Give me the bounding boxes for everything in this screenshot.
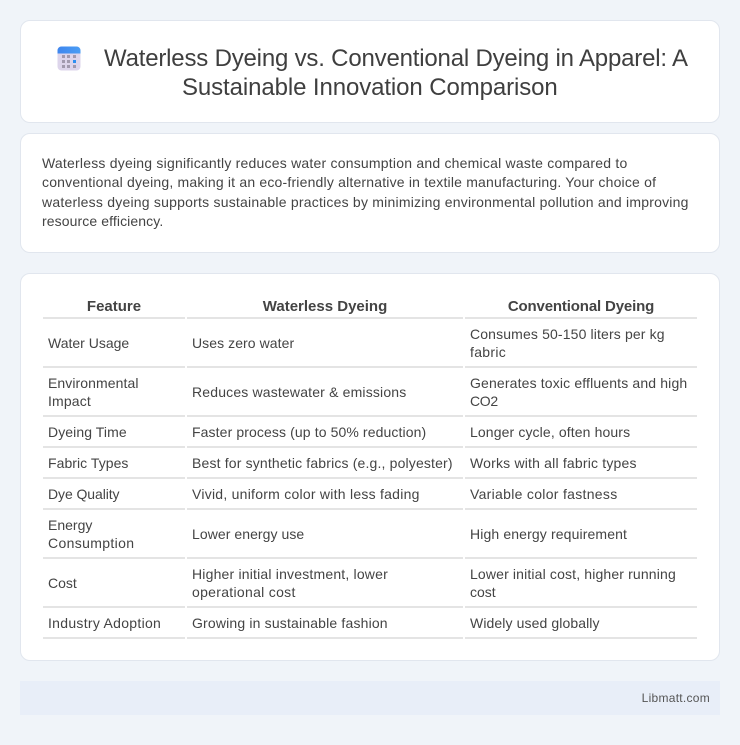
row: fabric types: Fabric Types xyxy=(48,455,128,471)
row: water usage: fabric xyxy=(470,344,506,360)
row: fabric types: Works with all fabric types xyxy=(470,455,637,471)
row: dye quality: Vivid, uniform color with less fading xyxy=(192,486,420,502)
row: cost: operational cost xyxy=(192,584,296,600)
row: cost: Higher initial investment, lower xyxy=(192,566,388,582)
row: dyeing time: Longer cycle, often hours xyxy=(470,424,630,440)
intro paragraph: resource efficiency. xyxy=(42,213,163,229)
title: Waterless Dyeing vs. Conventional Dyeing in Apparel: A xyxy=(104,45,688,72)
row: cost: cost xyxy=(470,584,496,600)
table header row xyxy=(43,298,697,319)
intro paragraph: waterless dyeing supports sustainable practices by minimizing environmental pollution and improving xyxy=(42,194,689,210)
header panel xyxy=(20,20,720,123)
row: cost: Lower initial cost, higher running xyxy=(470,566,676,582)
row: industry adoption: Growing in sustainable fashion xyxy=(192,615,388,631)
row: cost xyxy=(43,566,697,608)
row: water usage: Uses zero water xyxy=(192,335,294,351)
row: energy consumption: Lower energy use xyxy=(192,526,304,542)
table header row: Feature xyxy=(87,298,141,315)
row: water usage: Consumes 50-150 liters per kg xyxy=(470,326,665,342)
intro paragraph xyxy=(42,155,689,229)
row: environmental impact: CO2 xyxy=(470,393,498,409)
row: industry adoption: Industry Adoption xyxy=(48,615,161,631)
comparison table panel xyxy=(20,273,720,661)
footer bar xyxy=(20,681,720,715)
row: dye quality xyxy=(43,486,697,510)
intro paragraph: conventional dyeing, making it an eco-friendly alternative in textile manufacturing. Your choice of xyxy=(42,174,656,190)
row: water usage xyxy=(43,326,697,368)
table header row: Waterless Dyeing xyxy=(263,298,387,315)
row: environmental impact: Impact xyxy=(48,393,91,409)
row: dye quality: Dye Quality xyxy=(48,486,119,502)
row: dyeing time: Dyeing Time xyxy=(48,424,127,440)
row: dyeing time xyxy=(43,424,697,448)
row: energy consumption: Energy xyxy=(48,517,92,533)
title: Sustainable Innovation Comparison xyxy=(182,74,558,101)
intro text panel xyxy=(20,133,720,253)
table header row: Conventional Dyeing xyxy=(508,298,654,315)
title xyxy=(104,45,688,101)
row: environmental impact xyxy=(43,375,697,417)
row: dyeing time: Faster process (up to 50% reduction) xyxy=(192,424,426,440)
row: environmental impact: Environmental xyxy=(48,375,139,391)
row: energy consumption xyxy=(43,517,697,559)
row: fabric types: Best for synthetic fabrics (e.g., polyester) xyxy=(192,455,453,471)
row: water usage: Water Usage xyxy=(48,335,129,351)
row: dye quality: Variable color fastness xyxy=(470,486,618,502)
intro paragraph: Waterless dyeing significantly reduces water consumption and chemical waste compared to xyxy=(42,155,627,171)
row: environmental impact: Generates toxic effluents and high xyxy=(470,375,687,391)
row: industry adoption xyxy=(43,615,697,639)
row: energy consumption: Consumption xyxy=(48,535,134,551)
row: fabric types xyxy=(43,455,697,479)
row: cost: Cost xyxy=(48,575,77,591)
row: industry adoption: Widely used globally xyxy=(470,615,600,631)
row: environmental impact: Reduces wastewater & emissions xyxy=(192,384,406,400)
icon: calendar grid xyxy=(58,46,80,70)
row: energy consumption: High energy requirement xyxy=(470,526,627,542)
footer credit: Libmatt.com xyxy=(642,691,710,705)
